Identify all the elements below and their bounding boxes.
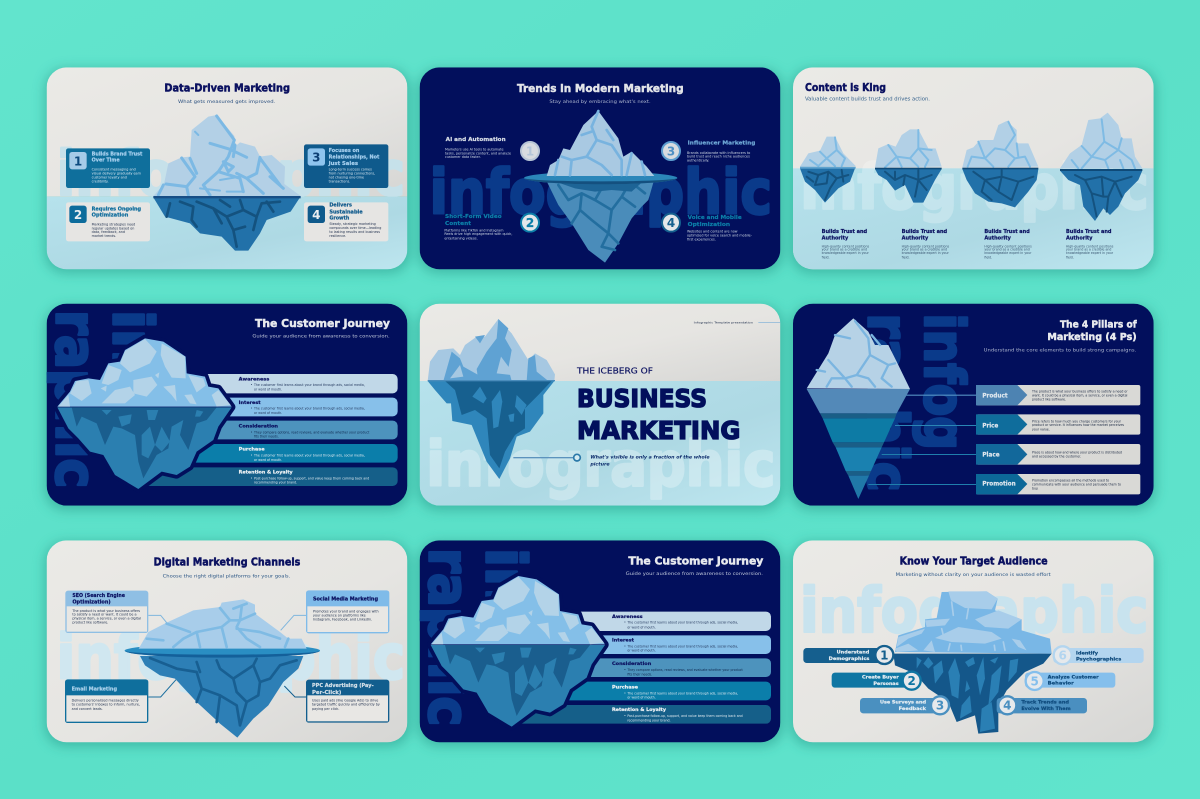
stage: purchase: or word of mouth.	[254, 458, 282, 462]
card background: raphic	[417, 548, 481, 726]
column 3 text: Authority	[984, 236, 1012, 242]
point 3: authentically.	[687, 159, 709, 163]
tagline: picture	[589, 461, 610, 467]
callout 2: Marketing strategies need	[92, 222, 135, 226]
card: email: Delivers personalized messages directly	[72, 699, 139, 703]
pill 6: 6	[1058, 649, 1067, 663]
column 4 text: knowledgeable expert in your	[1066, 251, 1114, 255]
card background	[793, 67, 1154, 269]
row: price: product or service. It influences how the market perceives	[1032, 423, 1124, 427]
stage: retention	[239, 469, 369, 485]
card background	[793, 540, 1154, 742]
stage: retention: Post-purchase follow-up, support, and value keep them coming back and	[254, 476, 369, 480]
column 4 text: High-quality content positions	[1066, 244, 1114, 248]
card: seo: physical item, a service, or even a digital	[72, 617, 141, 621]
iceberg	[153, 115, 301, 251]
pill 5	[1025, 672, 1115, 690]
point 2: Reels drive high engagement with quick,	[444, 232, 512, 236]
stage: consideration	[612, 661, 743, 676]
column 2 text: High-quality content positions	[902, 244, 949, 248]
column 1 text: knowledgeable expert in your	[822, 251, 869, 255]
row: product: want. It could be a physical item, a service, or even a digital	[1032, 393, 1128, 397]
main title: MARKETING	[577, 416, 740, 445]
pill 6: Psychographics	[1076, 657, 1122, 663]
row: place: Place is about how and where your product is distributed	[1032, 450, 1122, 454]
column 3 text: High-quality content positions	[984, 244, 1032, 248]
title: Marketing (4 Ps)	[1047, 332, 1137, 343]
callout 2: Optimization	[92, 213, 129, 219]
card background: infog	[474, 548, 538, 708]
stage: purchase: The customer first learns about your brand through ads, social media,	[626, 691, 738, 695]
callout 4: to lasting results and business	[329, 230, 380, 234]
subtitle: Stay ahead by embracing what's next.	[549, 99, 651, 105]
point 1	[445, 137, 539, 160]
stage: interest: The customer first learns about your brand through ads, social media,	[626, 644, 738, 648]
subtitle: Guide your audience from awareness to conversion.	[252, 333, 390, 339]
row: price	[976, 414, 1140, 435]
card background	[420, 304, 780, 506]
callout 1: 1	[74, 154, 82, 168]
callout 3: 3	[312, 151, 321, 165]
template label	[694, 321, 780, 325]
stage: purchase: •	[624, 691, 626, 695]
card: social media	[306, 590, 389, 633]
stage: purchase: Purchase	[239, 447, 265, 453]
panel: customer journey	[44, 304, 407, 506]
row: promotion: Promotion	[982, 481, 1016, 488]
stage: awareness: The customer first learns about your brand through ads, social media,	[253, 383, 365, 387]
stage: interest	[239, 400, 365, 415]
pill 2: Personas	[873, 681, 899, 687]
card: social media: your audience on platforms like	[313, 613, 366, 617]
point 2	[444, 214, 539, 240]
panel: 4 pillars	[793, 304, 1154, 506]
stage: awareness	[239, 376, 365, 392]
title: Trends in Modern Marketing	[517, 82, 684, 95]
stage: consideration: •	[624, 668, 626, 672]
stage: awareness: Awareness	[612, 614, 643, 620]
title: The Customer Journey	[628, 555, 763, 568]
stage: purchase	[239, 447, 365, 462]
callout 3: not chasing one-time	[329, 175, 364, 179]
card background: infographic	[57, 622, 405, 694]
column 2 text: field.	[902, 255, 909, 259]
stage: retention: recommending your brand.	[254, 481, 297, 485]
column 4 text: your brand as a credible and	[1066, 248, 1111, 252]
callout 2: Requires Ongoing	[92, 206, 141, 212]
tagline: What's visible is only a fraction of the whole	[590, 455, 710, 461]
callout 3: Long-term success comes	[329, 168, 372, 172]
callout 1: Consistent messaging and	[92, 167, 136, 171]
point 2: Platforms like TikTok and Instagram	[444, 228, 503, 232]
callout 1	[66, 148, 150, 188]
iceberg tall	[1060, 113, 1142, 221]
callout 3: Just Sales	[328, 161, 358, 167]
callout 1: visual delivery gradually earn	[92, 171, 141, 175]
title: Digital Marketing Channels	[154, 556, 300, 568]
column 1 text: your brand as a credible and	[822, 248, 867, 252]
stage: awareness: Awareness	[239, 376, 270, 382]
pill 3: Use Surveys and	[880, 700, 926, 706]
pill 5: 5	[1030, 674, 1039, 688]
callout 4: Delivers	[329, 203, 352, 209]
pill 1: 1	[880, 648, 889, 662]
row: price: Price refers to how much you charge customers for your	[1032, 419, 1122, 423]
iceberg medium	[875, 129, 942, 203]
stage: purchase: •	[251, 454, 253, 458]
pill 3: Feedback	[899, 706, 927, 712]
stage: consideration: fits their needs.	[627, 672, 652, 676]
iceberg small	[800, 137, 856, 203]
callout 4	[304, 202, 388, 241]
row: promotion: buy.	[1032, 486, 1038, 490]
point 2: Short-Form Video	[445, 214, 502, 220]
panel: know your target audience	[793, 540, 1154, 742]
pill 6: Identify	[1076, 650, 1098, 656]
title eyebrow: THE ICEBERG OF	[576, 367, 653, 376]
point 4: optimized for voice search and mobile-	[687, 233, 753, 237]
card background: infog	[912, 313, 976, 450]
callout 4: Steady, strategic marketing	[329, 222, 376, 226]
point 3: Influencer Marketing	[688, 141, 755, 147]
row: product: product like software.	[1032, 397, 1066, 401]
stage: interest: or word of mouth.	[627, 649, 656, 653]
card: email: and convert leads.	[72, 707, 103, 711]
point 4: Voice and Mobile	[688, 215, 742, 221]
card: seo: Optimization)	[72, 600, 111, 606]
card background	[417, 540, 780, 742]
subtitle: Guide your audience from awareness to conversion.	[626, 571, 763, 577]
stage: retention: Retention & Loyalty	[612, 707, 666, 713]
stage: retention: recommending your brand.	[627, 718, 671, 722]
row: place	[976, 444, 1140, 465]
row: promotion: Promotion encompasses all the methods used to	[1032, 478, 1109, 482]
row: place: and accessed by the customer.	[1032, 454, 1081, 458]
title: The Customer Journey	[255, 317, 390, 330]
card background: raphic	[855, 313, 919, 492]
point 1: 1	[526, 144, 534, 158]
card background: infographic	[426, 429, 775, 501]
stage: consideration: Consideration	[239, 423, 278, 429]
column 1 text: Builds Trust and	[822, 229, 868, 235]
stage: consideration: They compare options, read reviews, and evaluate whether your product	[253, 430, 370, 434]
card: email	[65, 679, 148, 723]
pill 2	[832, 672, 921, 690]
column 1 text: Authority	[822, 236, 849, 242]
subtitle: Valuable content builds trust and drives action.	[805, 97, 930, 103]
callout 4: resilience.	[329, 234, 346, 238]
callout 4: Growth	[329, 216, 350, 222]
callout 4: compounds over time—leading	[329, 226, 381, 230]
tagline	[589, 455, 710, 467]
callout 2	[66, 202, 150, 241]
column 3 text	[984, 229, 1032, 259]
point 2: entertaining videos.	[444, 236, 478, 240]
callout 1: customer loyalty and	[92, 175, 127, 179]
stage: interest: or word of mouth.	[254, 411, 282, 415]
template label: Infographic Template presentation	[694, 321, 753, 325]
stage: awareness: or word of mouth.	[627, 625, 656, 629]
point 1: Marketers use AI tools to automate	[445, 148, 504, 152]
callout 2: market trends.	[92, 234, 116, 238]
leader lines	[868, 395, 976, 485]
point 3: build trust and reach niche audiences	[687, 155, 750, 159]
title: Know Your Target Audience	[900, 555, 1048, 567]
pill 2: 2	[907, 674, 916, 688]
callout 1: Builds Brand Trust	[92, 152, 143, 158]
callout 2: data, feedback, and	[92, 230, 125, 234]
callout 3: transactions.	[329, 179, 350, 183]
card background: raphic	[44, 310, 108, 488]
column 4 text: Builds Trust and	[1066, 229, 1112, 235]
stage: interest: Interest	[239, 400, 261, 406]
pill 3: 3	[936, 699, 944, 713]
stage: retention: Retention & Loyalty	[239, 469, 293, 475]
iceberg	[57, 338, 232, 489]
pill 2: Create Buyer	[862, 675, 899, 681]
card background: infog	[100, 310, 164, 470]
panel: digital marketing channels	[47, 540, 407, 742]
stage: awareness	[612, 614, 738, 629]
pill 1: Demographics	[829, 656, 870, 662]
panel: customer journey repeat	[417, 540, 780, 742]
card: seo: product like software.	[72, 621, 108, 625]
column 2 text: your brand as a credible and	[902, 248, 947, 252]
callout 2: regular updates based on	[92, 226, 134, 230]
card background: infographic	[800, 575, 1148, 647]
subtitle: Choose the right digital platforms for your goals.	[163, 574, 290, 580]
callout 1: credibility.	[92, 179, 109, 183]
pill 6	[1053, 646, 1144, 664]
point 1: AI and Automation	[446, 137, 506, 143]
card background	[47, 540, 407, 742]
stage: consideration: Consideration	[612, 661, 651, 667]
callout 4: 4	[312, 208, 321, 222]
callout 4: Sustainable	[329, 209, 363, 215]
column 3 text: your brand as a credible and	[984, 248, 1030, 252]
iceberg	[807, 318, 910, 499]
title: Content is King	[805, 81, 886, 94]
iceberg	[125, 599, 320, 738]
point 1: customer data faster.	[445, 155, 481, 159]
card background	[44, 304, 407, 506]
point 4: first experiences.	[687, 237, 716, 241]
card: ppc: paying per click.	[312, 707, 339, 711]
stage: interest	[612, 638, 738, 653]
subtitle: What gets measured gets improved.	[178, 99, 275, 105]
card background: infographic	[57, 138, 405, 210]
stage bars	[513, 612, 771, 724]
point 1: tasks, personalize content, and analyze	[445, 151, 511, 155]
row: product	[976, 385, 1140, 405]
stage: interest: •	[624, 644, 626, 648]
point 2: 2	[526, 216, 534, 230]
card background	[47, 67, 407, 269]
stage: awareness: •	[624, 621, 626, 625]
point 3	[662, 141, 755, 163]
card background: infographic	[430, 156, 772, 228]
column 2 text: Authority	[902, 236, 929, 242]
card: email: to customers' inboxes to inform, nurture,	[72, 703, 140, 707]
column 3 text: field.	[984, 255, 992, 259]
row: place: Place	[982, 451, 1000, 458]
stage: purchase: or word of mouth.	[627, 696, 656, 700]
title: The 4 Pillars of	[1060, 319, 1137, 330]
subtitle: Marketing without clarity on your audience is wasted effort	[896, 572, 1051, 578]
card: seo: to satisfy a need or want. It could be a	[72, 613, 137, 617]
point 4: 4	[667, 216, 675, 230]
iceberg large	[962, 121, 1038, 207]
column 4 text: field.	[1066, 255, 1074, 259]
pill 4: Track Trends and	[1021, 700, 1069, 706]
card: ppc: Per-Click)	[312, 690, 341, 696]
column 4 text	[1066, 229, 1114, 259]
card background	[793, 304, 1154, 506]
stage: retention: Post-purchase follow-up, support, and value keep them coming back and	[627, 714, 743, 718]
callout 3: Focuses on	[329, 148, 360, 154]
card: social media: Promotes your brand and engages with	[313, 610, 379, 614]
column 1 text	[822, 229, 869, 259]
subtitle: Understand the core elements to build strong campaigns.	[984, 347, 1136, 353]
title: Data-Driven Marketing	[164, 82, 290, 95]
point 4: Websites and content are now	[687, 230, 738, 234]
stage: interest: •	[251, 407, 253, 411]
pill 4: 4	[1003, 699, 1012, 713]
point 2: Content	[445, 221, 471, 227]
iceberg	[893, 591, 1052, 734]
card: email: Email Marketing	[72, 686, 117, 692]
card: social media: Instagram, Facebook, and LinkedIn.	[313, 618, 372, 622]
iceberg	[428, 319, 573, 479]
point 3: Brands collaborate with influencers to	[687, 151, 750, 155]
row: promotion: communicate with your audience and persuade them to	[1032, 482, 1121, 486]
callout 1: Over Time	[92, 158, 120, 164]
stage: purchase: The customer first learns about your brand through ads, social media,	[253, 454, 365, 458]
stage: interest: The customer first learns about your brand through ads, social media,	[253, 407, 365, 411]
pill 4: Evolve With Them	[1021, 706, 1071, 712]
callout 2: 2	[74, 208, 82, 222]
column 2 text: Builds Trust and	[902, 229, 948, 235]
iceberg	[524, 111, 677, 263]
row: product: The product is what your business offers to satisfy a need or	[1031, 390, 1128, 394]
main title	[577, 384, 740, 445]
pill 3	[860, 696, 949, 714]
stage: interest: Interest	[612, 638, 635, 644]
card: ppc: targeted traffic quickly and efficiently by	[312, 703, 380, 707]
panel: trends in modern marketing	[420, 67, 780, 269]
stage: consideration: They compare options, read reviews, and evaluate whether your product	[626, 668, 743, 672]
column 3 text: Builds Trust and	[984, 229, 1030, 235]
card: ppc: PPC Advertising (Pay-	[312, 683, 374, 689]
pill 1	[803, 646, 893, 664]
stage: awareness: •	[251, 383, 253, 387]
row: price: your value.	[1032, 427, 1050, 431]
stage: retention: •	[251, 476, 253, 480]
column 1 text: field.	[822, 255, 829, 259]
stage: consideration: fits their needs.	[254, 435, 279, 439]
panel: content is king	[793, 67, 1154, 269]
card background: infographic	[800, 151, 1149, 223]
pill 4	[997, 696, 1087, 714]
row: price: Price	[982, 422, 998, 429]
row: product: Product	[982, 392, 1008, 399]
column 4 text: Authority	[1066, 236, 1093, 242]
stage: purchase: Purchase	[612, 684, 638, 690]
stage: awareness: The customer first learns about your brand through ads, social media,	[626, 621, 738, 625]
callout 3: from nurturing connections,	[329, 172, 375, 176]
column 3 text: knowledgeable expert in your	[984, 251, 1032, 255]
pill 1: Understand	[837, 650, 869, 656]
stage: purchase	[612, 684, 738, 700]
point 4	[662, 214, 753, 241]
point 3: 3	[667, 144, 675, 158]
panel: cover	[420, 304, 780, 506]
column 1 text: High-quality content positions	[822, 244, 869, 248]
card: seo: SEO (Search Engine	[72, 593, 126, 599]
title	[1047, 319, 1137, 343]
stage bars	[140, 374, 398, 486]
main title: BUSINESS	[577, 384, 707, 413]
card shadows	[45, 69, 1156, 746]
row: promotion	[976, 474, 1140, 494]
pill 5: Analyze Customer	[1048, 675, 1099, 681]
stage: consideration	[239, 423, 370, 439]
card background	[420, 67, 780, 269]
column 2 text	[902, 229, 949, 259]
marker	[574, 454, 580, 461]
stage: consideration: •	[251, 430, 253, 434]
card: social media: Social Media Marketing	[313, 597, 378, 603]
card: seo	[65, 591, 148, 633]
stage: retention	[612, 707, 743, 722]
callout 3: Relationships, Not	[329, 155, 380, 161]
panel: data-driven marketing	[47, 67, 407, 269]
pill 5: Behavior	[1048, 681, 1074, 687]
card: ppc: Uses paid ads (like Google Ads) to drive	[312, 699, 378, 703]
card: seo: The product is what your business offers	[71, 609, 140, 613]
card: ppc	[306, 680, 389, 723]
stage: awareness: or word of mouth.	[254, 388, 282, 392]
stage: retention: •	[624, 714, 626, 718]
connectors	[148, 615, 306, 697]
point 4: Optimization	[688, 222, 730, 228]
iceberg	[431, 576, 605, 727]
callout 3	[304, 144, 388, 188]
column 2 text: knowledgeable expert in your	[902, 251, 949, 255]
